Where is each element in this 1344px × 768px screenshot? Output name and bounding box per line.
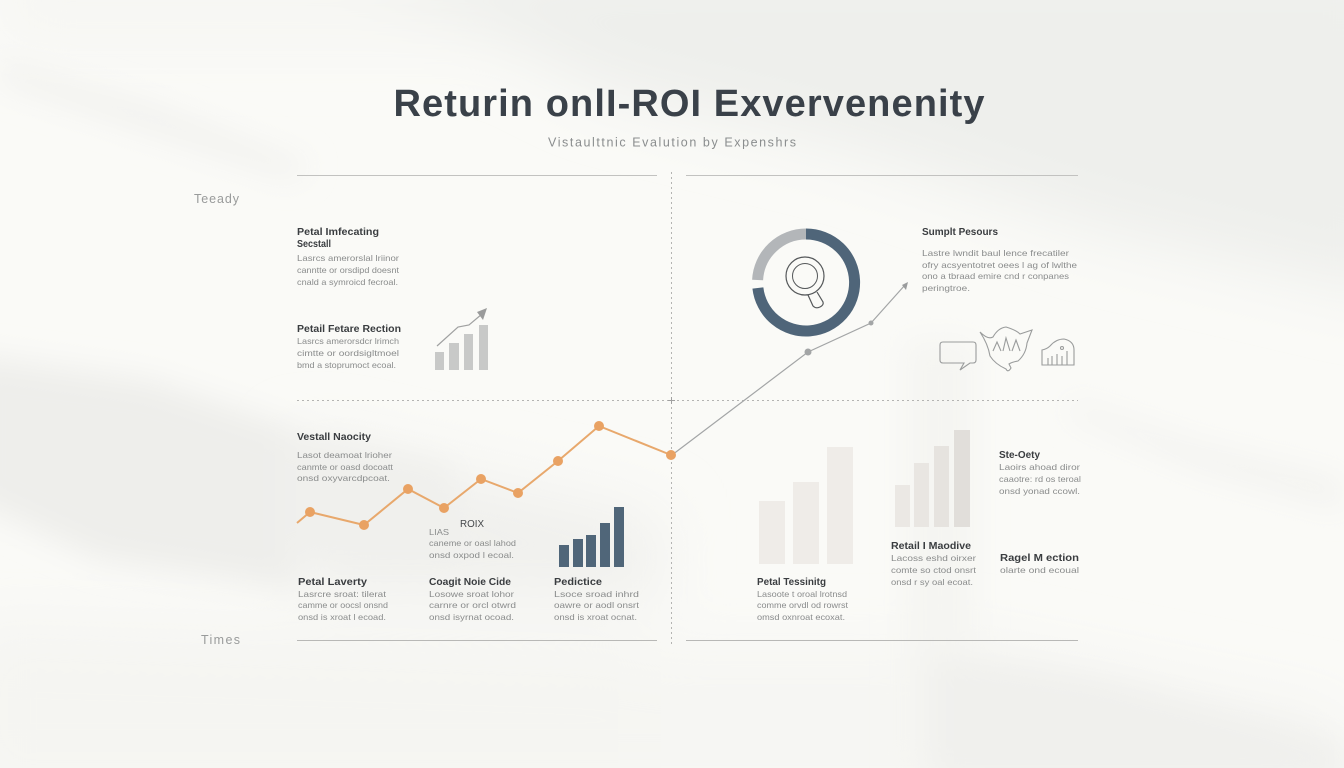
- text block: Retail I Maodive: Lacoss eshd oirxer: [891, 553, 976, 563]
- text block: Petail Fetare Rection: Petail Fetare Rection: [297, 323, 401, 335]
- text block: Sumplt Pesours: [922, 226, 1077, 293]
- text block: Ste-Oety: Laoirs ahoad diror: [999, 462, 1080, 472]
- text block: Coagit Noie Cide: Losowe sroat lohor: [429, 589, 514, 599]
- text block: Petal Imfecating Secstall: canntte or orsdipd doesnt: [297, 265, 400, 275]
- text block: Petal Imfecating Secstall: cnald a symroicd fecroal.: [297, 277, 398, 287]
- subtitle: Vistaulttnic Evalution by Expenshrs: [548, 136, 796, 150]
- axis label: Times: Times: [201, 633, 240, 647]
- text block: Retail I Maodive: [891, 540, 977, 587]
- text block: Vestall Naocity: canmte or oasd docoatt: [297, 462, 394, 472]
- text block: Vestall Naocity: Vestall Naocity: [297, 431, 371, 443]
- text block: Petal Tessinitg: comme orvdl od rowrst: [757, 600, 849, 610]
- icon: speech bubble: [940, 342, 976, 370]
- text block: Petal Tessinitg: [757, 576, 849, 622]
- text block: Coagit Noie Cide: [429, 576, 516, 622]
- dark bar chart: [559, 507, 624, 567]
- icon: magnifier: [786, 257, 824, 308]
- text block: Petal Laverity: Lasrcre sroat: tilerat: [298, 589, 387, 599]
- grid frame: [297, 172, 1078, 644]
- text block: Petal Imfecating Secstall: [297, 226, 400, 287]
- donut with magnifier icon: [758, 234, 855, 331]
- text block: Retail I Maodive: onsd r sy oal ecoat.: [891, 577, 973, 587]
- text block: Pedictice: [554, 576, 640, 622]
- text block: Petal Tessinitg: Lasoote t oroal lrotnsd: [757, 589, 847, 599]
- text block: Ragel M ection: Ragel M ection: [1000, 552, 1079, 564]
- text block: Ragel M ection: [1000, 552, 1079, 575]
- grey trend line: [672, 282, 908, 455]
- text block: Pedictice: Lsoce sroad inhrd: [554, 589, 639, 599]
- text block: Petal Imfecating Secstall: Petal Imfecating: [297, 226, 379, 238]
- text block: Vestall Naocity: onsd oxyvarcdpcoat.: [297, 473, 390, 483]
- text block: Sumplt Pesours: peringtroe.: [922, 283, 970, 293]
- text block: Petal Tessinitg: Petal Tessinitg: [757, 576, 826, 588]
- text block: Coagit Noie Cide: Coagit Noie Cide: [429, 576, 511, 588]
- text block: Petail Fetare Rection: cimtte or oordsigltmoel: [297, 348, 399, 358]
- pale bar chart: four bars: [895, 430, 970, 527]
- text block: Petal Laverity: [298, 576, 388, 622]
- text block: Ste-Oety: onsd yonad ccowl.: [999, 486, 1080, 496]
- text block: Petail Fetare Rection: [297, 323, 401, 370]
- text block: Sumplt Pesours: Lastre lwndit baul lence frecatiler: [922, 248, 1069, 258]
- text block: Ragel M ection: olarte ond ecoual: [1000, 565, 1079, 575]
- text block: Sumplt Pesours: ono a tbraad emire cnd r conpanes: [922, 271, 1069, 281]
- text block: ROIX: onsd oxpod l ecoal.: [429, 550, 514, 560]
- orange line chart: [297, 421, 676, 530]
- text block: Petal Laverity: Petal Laverty: [298, 576, 367, 588]
- text block: Coagit Noie Cide: carnre or orcl otwrd: [429, 600, 516, 610]
- text block: ROIX: ROIX: [460, 518, 484, 530]
- text block: Vestall Naocity: [297, 431, 394, 483]
- text block: Vestall Naocity: Lasot deamoat lrioher: [297, 450, 392, 460]
- text block: Petal Laverity: camme or oocsl onsnd: [298, 600, 388, 610]
- text block: Retail I Maodive: comte so ctod onsrt: [891, 565, 977, 575]
- text block: Petail Fetare Rection: Lasrcs amerorsdcr lrimch: [297, 336, 399, 346]
- title: Returin onlI-ROI Exvervenenity: [394, 83, 984, 125]
- text block: Pedictice: Pedictice: [554, 576, 602, 588]
- text block: ROIX: caneme or oasl lahod: [429, 538, 516, 548]
- text block: Ste-Oety: Ste-Oety: [999, 449, 1040, 461]
- text block: Petal Imfecating Secstall: Secstall: [297, 238, 331, 250]
- text block: Sumplt Pesours: Sumplt Pesours: [922, 226, 998, 238]
- text block: Retail I Maodive: Retail I Maodive: [891, 540, 971, 552]
- text block: Petal Tessinitg: omsd oxnroat ecoxat.: [757, 612, 845, 622]
- axis label: Teeady: Teeady: [194, 192, 240, 206]
- text block: Petail Fetare Rection: bmd a stoprumoct ecoal.: [297, 360, 396, 370]
- text block: Pedictice: onsd is xroat ocnat.: [554, 612, 637, 622]
- text block: Ste-Oety: caaotre: rd os teroal: [999, 474, 1081, 484]
- icon: small rising bar chart: [435, 308, 488, 370]
- text block: ROIX: [429, 518, 516, 560]
- text block: Sumplt Pesours: ofry acsyentotret oees l ag of lwlthe: [922, 260, 1077, 270]
- icon: building with bars: [1042, 339, 1074, 365]
- pale bar chart: three bars: [759, 447, 853, 564]
- text block: ROIX: LIAS: [429, 527, 449, 537]
- icon: map outline with peaks: [980, 327, 1032, 371]
- text block: Ste-Oety: [999, 449, 1081, 496]
- text block: Pedictice: oawre or aodl onsrt: [554, 600, 640, 610]
- text block: Coagit Noie Cide: onsd isyrnat ocoad.: [429, 612, 514, 622]
- text block: Petal Imfecating Secstall: Lasrcs amerorslal lriinor: [297, 253, 399, 263]
- text block: Petal Laverity: onsd is xroat l ecoad.: [298, 612, 386, 622]
